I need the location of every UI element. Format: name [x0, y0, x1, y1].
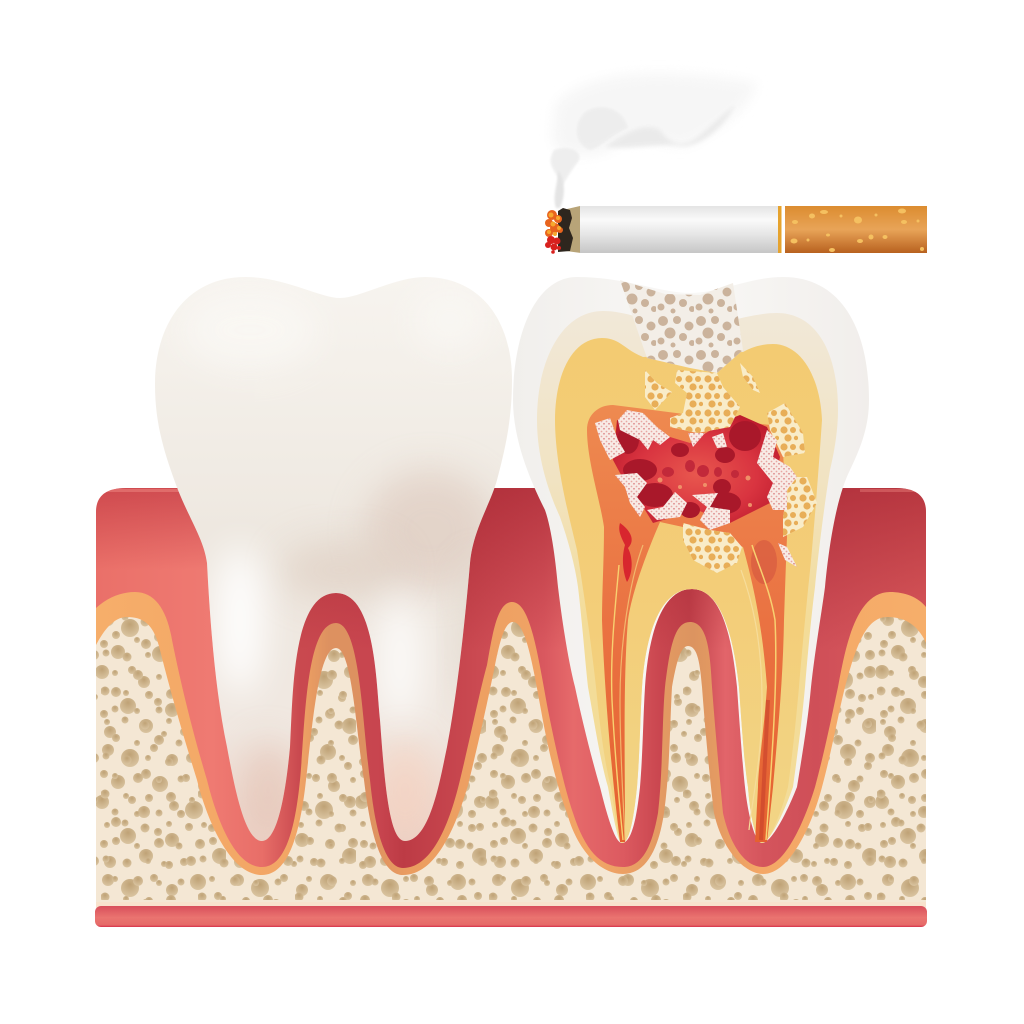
decay: white crystal shards: [595, 410, 797, 567]
pulp chamber and canals: [587, 405, 787, 842]
filter: [785, 206, 927, 253]
filter speckles: [790, 208, 924, 252]
gum: orange layer: [96, 560, 926, 875]
gold band: [778, 206, 782, 253]
base strip: [95, 902, 927, 927]
smoke: [551, 74, 757, 208]
decayed tooth cross-section: [513, 277, 869, 843]
cream dentin layer: [537, 311, 838, 843]
gum: pink tissue: [96, 488, 926, 868]
decay: porous enamel patch: [620, 280, 743, 373]
enamel: [513, 277, 869, 843]
illustration: smoking damage to teeth and gums: [95, 84, 927, 927]
decay: yellow porous mesh: [645, 363, 817, 573]
yellow dentin: [555, 338, 822, 843]
decay: red lesion: [613, 415, 780, 523]
healthy tooth: [155, 277, 512, 841]
canal details: [612, 523, 777, 840]
panel: bone: [96, 600, 926, 908]
ember: [545, 210, 563, 254]
paper: [580, 206, 778, 253]
cigarette: [545, 206, 927, 254]
burnt paper edge: [566, 206, 581, 253]
